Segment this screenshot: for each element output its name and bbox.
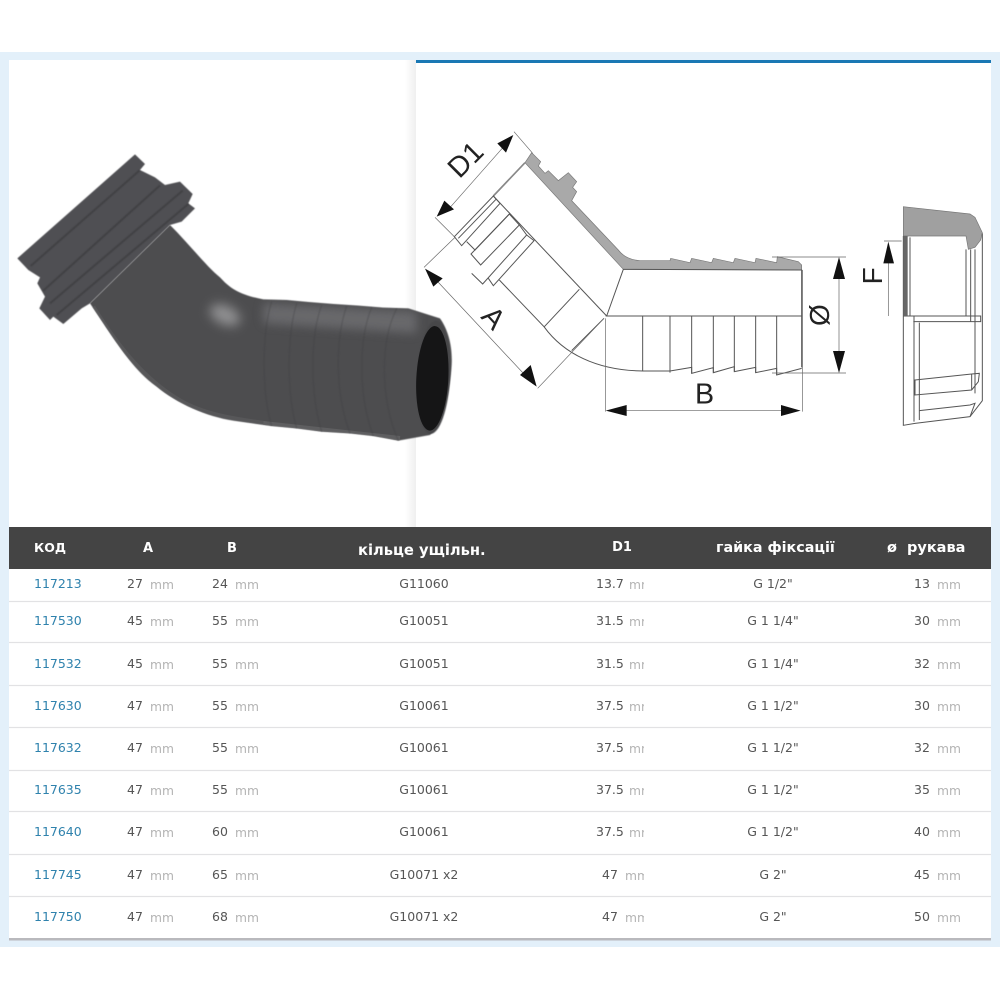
row 117530: mm <box>150 615 174 629</box>
row 117532: mm <box>937 658 961 672</box>
row 117632: 55 <box>212 740 228 755</box>
panel shadow <box>405 60 416 527</box>
row 117213: mm <box>235 578 259 592</box>
row 117745: mm <box>937 869 961 883</box>
row 117630: mm <box>235 700 259 714</box>
table header: гайка фіксації <box>716 540 835 556</box>
dimension A <box>424 237 604 388</box>
elbow body <box>90 225 452 441</box>
row 117635: mm <box>937 784 961 798</box>
row 117632: mm <box>937 742 961 756</box>
table header: D1 <box>612 540 632 555</box>
row 117745: 65 <box>212 867 228 882</box>
row 117750: 47 <box>127 909 143 924</box>
nut outlines <box>903 233 982 425</box>
table header <box>9 527 991 569</box>
row 117632 <box>35 743 960 754</box>
row 117750: 47 <box>602 909 618 924</box>
row 117745 <box>35 870 960 880</box>
row 117213: 27 <box>127 576 143 591</box>
row 117532: G 1 1/4" <box>747 656 799 671</box>
row 117635 <box>35 785 960 796</box>
row 117635: 117635 <box>34 782 82 797</box>
dimension B <box>606 270 803 416</box>
row 117750 <box>35 912 960 922</box>
row 117745: mm <box>625 869 649 883</box>
product photo: elbow fitting <box>17 154 453 441</box>
row 117750: mm <box>625 911 649 925</box>
row 117213: 117213 <box>34 576 82 591</box>
row 117632: 32 <box>914 740 930 755</box>
body outlines <box>454 163 802 375</box>
table header: КОД <box>34 540 66 555</box>
row 117640: 37.5 <box>596 824 624 839</box>
row 117532: mm <box>629 658 653 672</box>
row 117635: mm <box>235 784 259 798</box>
row 117530 <box>35 616 960 626</box>
table bottom edge <box>9 938 991 940</box>
dimension F: F <box>857 267 888 284</box>
pipe mouth rim <box>414 320 453 435</box>
row 117635: 55 <box>212 782 228 797</box>
row 117750: mm <box>150 911 174 925</box>
row 117530: 55 <box>212 613 228 628</box>
row 117635: G 1 1/2" <box>747 782 799 797</box>
row 117532: 55 <box>212 656 228 671</box>
row 117530: 117530 <box>34 613 82 628</box>
row 117630: G10061 <box>399 698 449 713</box>
row 117640 <box>35 827 960 838</box>
row 117530: 31.5 <box>596 613 624 628</box>
row 117632: G 1 1/2" <box>747 740 799 755</box>
table header: A <box>143 541 153 556</box>
row 117632: 47 <box>127 740 143 755</box>
row 117632: mm <box>629 742 653 756</box>
section hatch <box>525 153 802 270</box>
table header: B <box>227 541 237 556</box>
row 117745: 117745 <box>34 867 82 882</box>
dimension F <box>857 241 902 316</box>
row 117630 <box>35 701 960 712</box>
row 117640: mm <box>937 826 961 840</box>
technical drawing: nut section <box>857 207 982 425</box>
dimension A: A <box>475 300 512 337</box>
row 117750: mm <box>235 911 259 925</box>
row 117635: 35 <box>914 782 930 797</box>
flange rings <box>17 154 195 324</box>
row 117632: 37.5 <box>596 740 624 755</box>
row 117213: 24 <box>212 576 228 591</box>
row 117532: G10051 <box>399 656 449 671</box>
row 117745: 47 <box>602 867 618 882</box>
row 117630: 37.5 <box>596 698 624 713</box>
row 117640: 117640 <box>34 824 82 839</box>
row 117632: G10061 <box>399 740 449 755</box>
row 117750: 117750 <box>34 909 82 924</box>
row 117213: G11060 <box>399 576 449 591</box>
table header: ø <box>887 540 897 556</box>
row 117630: 55 <box>212 698 228 713</box>
row 117530: G 1 1/4" <box>747 613 799 628</box>
row 117640: mm <box>629 826 653 840</box>
row 117632: mm <box>235 742 259 756</box>
row 117630: 30 <box>914 698 930 713</box>
table header: кільце ущільн. <box>358 542 486 559</box>
row 117213: mm <box>150 578 174 592</box>
row 117530: mm <box>235 615 259 629</box>
dimension D1 <box>435 132 533 237</box>
row 117745: mm <box>235 869 259 883</box>
row 117745: 45 <box>914 867 930 882</box>
dimension Ø <box>772 257 846 373</box>
row 117532: 45 <box>127 656 143 671</box>
row 117745: mm <box>150 869 174 883</box>
flange grooves <box>31 171 188 315</box>
body shading <box>93 300 417 438</box>
row 117530: 45 <box>127 613 143 628</box>
technical drawing: side section <box>424 132 803 416</box>
row 117213: 13 <box>914 576 930 591</box>
dimension B: B <box>695 378 714 410</box>
row 117630: mm <box>150 700 174 714</box>
row 117532: mm <box>235 658 259 672</box>
row 117640: G 1 1/2" <box>747 824 799 839</box>
pipe mouth opening <box>414 325 451 431</box>
row 117530: mm <box>629 615 653 629</box>
row 117640: 60 <box>212 824 228 839</box>
row 117213: G 1/2" <box>753 576 793 591</box>
row 117640: 40 <box>914 824 930 839</box>
row 117745: G 2" <box>759 867 787 882</box>
row 117750: mm <box>937 911 961 925</box>
row 117635: 37.5 <box>596 782 624 797</box>
row 117530: mm <box>937 615 961 629</box>
row 117213: 13.7 <box>596 576 624 591</box>
row 117532: 117532 <box>34 656 82 671</box>
row 117632: 117632 <box>34 740 82 755</box>
row 117640: G10061 <box>399 824 449 839</box>
row 117750: 68 <box>212 909 228 924</box>
row 117640: mm <box>150 826 174 840</box>
row 117530: 30 <box>914 613 930 628</box>
row dividers <box>9 602 991 896</box>
row 117745: 47 <box>127 867 143 882</box>
row 117750: 50 <box>914 909 930 924</box>
row 117630: mm <box>937 700 961 714</box>
row 117630: G 1 1/2" <box>747 698 799 713</box>
row 117635: mm <box>629 784 653 798</box>
barb ribs <box>264 302 398 441</box>
row 117630: mm <box>629 700 653 714</box>
row 117640: mm <box>235 826 259 840</box>
row 117530: G10051 <box>399 613 449 628</box>
row 117750: G10071 x2 <box>390 909 458 924</box>
row 117635: G10061 <box>399 782 449 797</box>
row 117532: 31.5 <box>596 656 624 671</box>
row 117632: mm <box>150 742 174 756</box>
dimension Ø: Ø <box>804 304 835 326</box>
dimension D1: D1 <box>442 136 490 184</box>
row 117640: 47 <box>127 824 143 839</box>
nut hatch <box>903 207 982 249</box>
row 117532 <box>35 659 960 670</box>
row 117750: G 2" <box>759 909 787 924</box>
row 117630: 117630 <box>34 698 82 713</box>
row 117635: 47 <box>127 782 143 797</box>
row 117635: mm <box>150 784 174 798</box>
blue top bar <box>416 60 991 63</box>
row 117213: mm <box>629 578 653 592</box>
row 117532: mm <box>150 658 174 672</box>
row 117213: mm <box>937 578 961 592</box>
row 117630: 47 <box>127 698 143 713</box>
row 117745: G10071 x2 <box>390 867 458 882</box>
row 117213 <box>35 579 960 590</box>
table header: рукава <box>907 540 965 556</box>
row 117532: 32 <box>914 656 930 671</box>
